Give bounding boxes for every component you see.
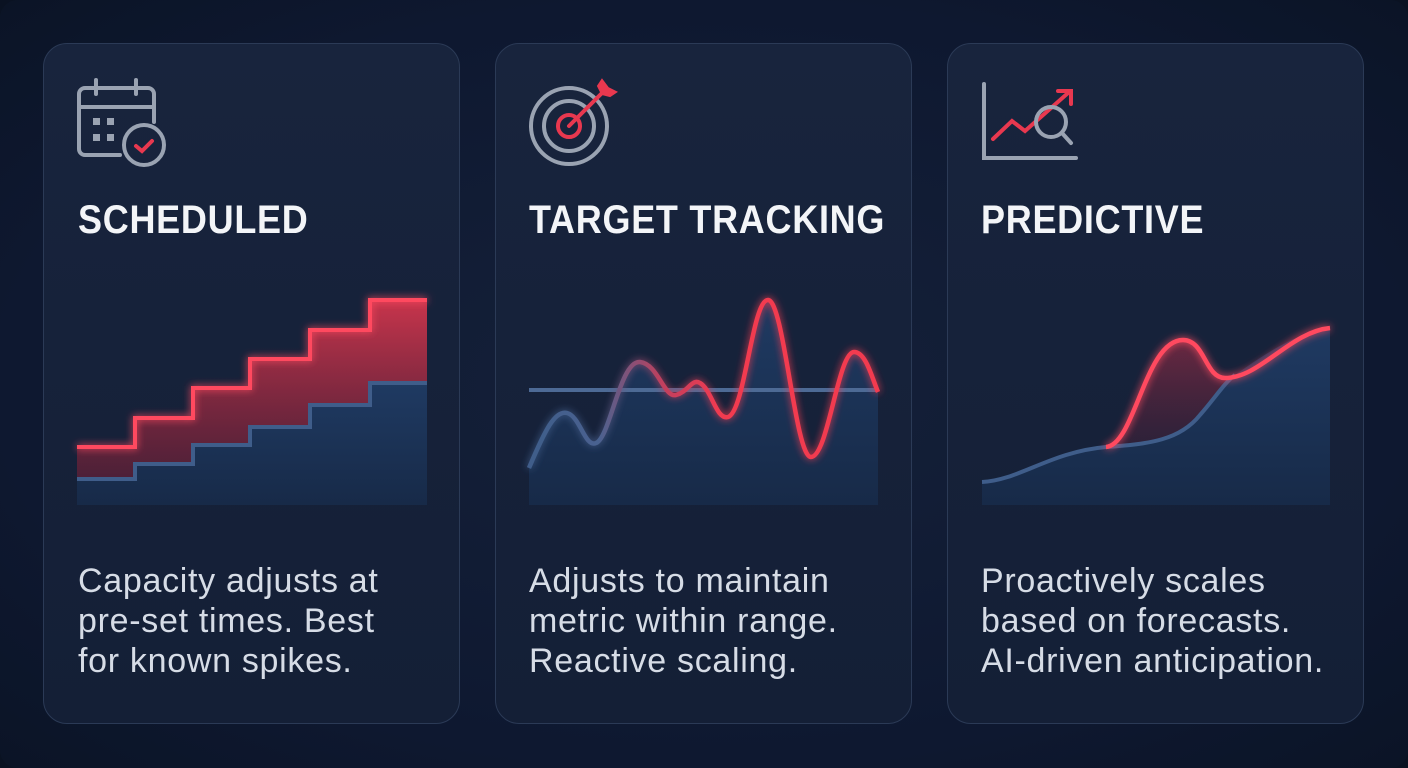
text: predictive: based on forecasts. xyxy=(981,602,1291,640)
text: scheduled xyxy=(78,562,379,680)
panel: predictive xyxy=(947,43,1364,724)
text: predictive xyxy=(981,562,1324,680)
text: scheduled: Capacity adjusts at xyxy=(78,562,379,600)
chart: target tracking wave xyxy=(529,300,878,505)
heading: target tracking: TARGET TRACKING xyxy=(529,198,885,242)
text: scheduled: for known spikes. xyxy=(78,642,353,680)
panel: target tracking xyxy=(495,43,912,724)
text: target tracking: Adjusts to maintain xyxy=(529,562,830,600)
text: target tracking: Reactive scaling. xyxy=(529,642,798,680)
text: target tracking xyxy=(529,562,838,680)
icon: target xyxy=(531,80,616,164)
text: predictive: AI-driven anticipation. xyxy=(981,642,1324,680)
chart: predictive curve xyxy=(982,328,1330,505)
heading: predictive: PREDICTIVE xyxy=(981,198,1204,242)
text: predictive: Proactively scales xyxy=(981,562,1266,600)
chart: scheduled steps xyxy=(77,300,427,505)
panel: scheduled xyxy=(43,43,460,724)
text: scheduled: pre-set times. Best xyxy=(78,602,375,640)
text: target tracking: metric within range. xyxy=(529,602,838,640)
icon: calendar xyxy=(79,80,164,165)
icon: chart with magnifier xyxy=(984,84,1076,158)
heading: scheduled: SCHEDULED xyxy=(78,198,308,242)
